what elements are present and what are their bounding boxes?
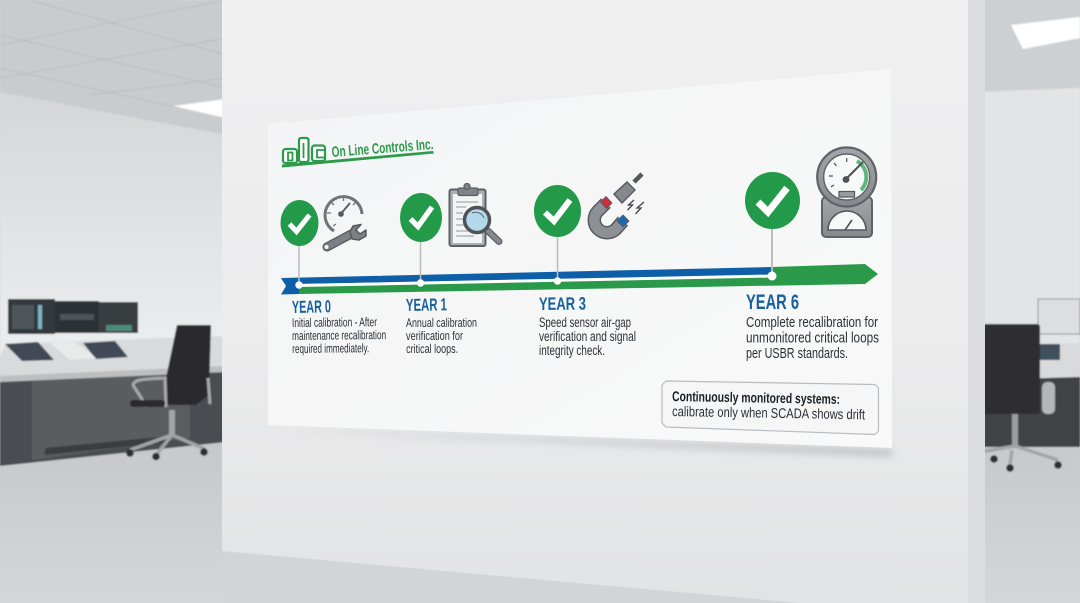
description: required immediately. [292, 341, 369, 356]
stem and node [295, 245, 303, 289]
background: left room [0, 0, 226, 603]
icon: clipboard and magnifier [450, 184, 499, 246]
floor in front of wall [222, 549, 980, 603]
milestone: Year 1 [400, 184, 499, 356]
left office chair [126, 325, 211, 460]
callout: continuously monitored systems: Continuously monitored systems: [672, 388, 840, 407]
left control desk [0, 299, 226, 466]
description: integrity check. [539, 343, 605, 358]
logo: On Line Controls Inc.: On Line Controls Inc. [331, 136, 434, 161]
heading: YEAR 3 [539, 294, 586, 314]
icon: magnet and speed sensor [594, 174, 644, 233]
milestone: Year 3 [534, 174, 644, 358]
icon: dual gauge panel [817, 148, 876, 237]
callout: continuously monitored systems: calibrate only when SCADA shows drift [672, 403, 865, 422]
description: verification for [406, 329, 463, 343]
poster: calibration timeline [268, 69, 892, 448]
icon: gauge and wrench [324, 197, 366, 249]
description: Annual calibration [406, 316, 477, 330]
background: right room [980, 0, 1080, 603]
description: per USBR standards. [746, 345, 848, 362]
check badge [534, 185, 581, 237]
heading: YEAR 6 [746, 291, 799, 314]
poster shadow [272, 80, 897, 456]
check badge [745, 172, 800, 229]
right office chair [980, 324, 1062, 472]
foreground wall [222, 0, 985, 603]
heading: YEAR 1 [406, 294, 447, 315]
right control desk [980, 299, 1080, 447]
stem and node [417, 240, 424, 287]
description: verification and signal [539, 329, 636, 344]
description: Speed sensor air-gap [539, 315, 631, 330]
heading: YEAR 0 [292, 296, 331, 317]
description: Complete recalibration for [746, 314, 878, 331]
check badge [400, 193, 442, 242]
check badge [280, 200, 318, 246]
description [292, 315, 386, 356]
milestone: Year 6 [745, 148, 879, 362]
milestone: Year 0 [280, 197, 386, 356]
description: maintenance recalibration [292, 328, 386, 343]
stem and node [554, 235, 561, 285]
description: Initial calibration - After [292, 315, 377, 330]
description: unmonitored critical loops [746, 330, 879, 346]
timeline ribbon [281, 264, 878, 294]
callout: continuously monitored systems [662, 381, 878, 434]
logo: On Line Controls Inc. [282, 136, 434, 168]
description [746, 314, 879, 362]
description: critical loops. [406, 342, 458, 356]
description [539, 315, 636, 358]
description [406, 316, 477, 356]
stem and node [768, 228, 776, 280]
